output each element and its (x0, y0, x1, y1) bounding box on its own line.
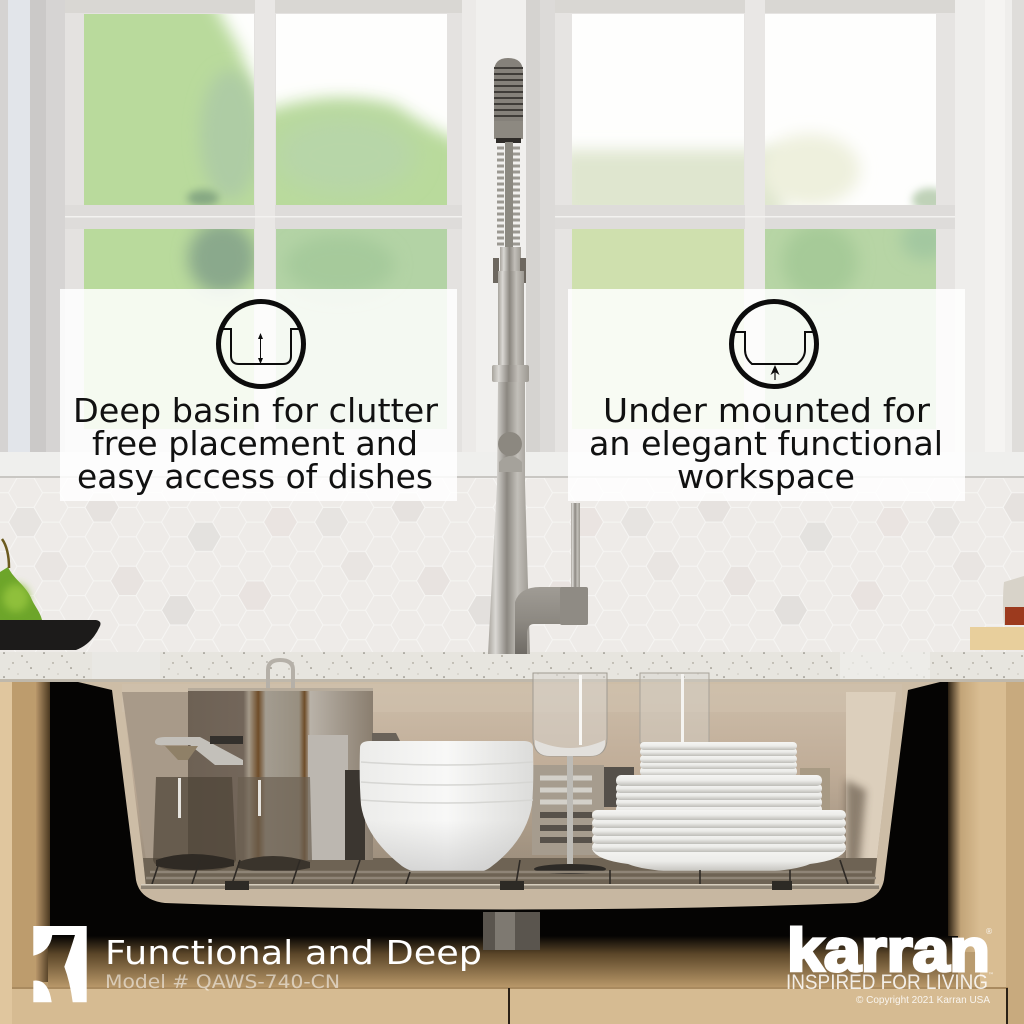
sink basin (78, 682, 940, 918)
faucet: rod (571, 503, 580, 589)
faucet (488, 58, 588, 654)
hexagon tile backsplash (0, 478, 1024, 654)
grid rack (141, 860, 879, 890)
faucet: spout (515, 587, 588, 654)
faucet: neck (488, 247, 530, 654)
large steel pot (155, 660, 400, 860)
icon: Karran R brand mark (33, 926, 87, 1002)
text: deep basin description: Deep basin for clutter (73, 391, 438, 430)
glass tumblers (153, 777, 312, 873)
window wall background (0, 0, 1024, 480)
drain (483, 912, 540, 950)
panel: deep basin callout (60, 289, 457, 501)
wine glass (533, 673, 607, 874)
logo: karran inspired for living: ® (985, 927, 993, 936)
icon: under mounted basin with up arrow (732, 302, 816, 386)
cabinet side panels and black interior (0, 682, 1024, 1024)
text: under mounted description: an elegant functional (589, 424, 943, 463)
window sill (0, 452, 1024, 478)
stacked white bowls (360, 741, 533, 873)
logo: karran inspired for living: ™ (988, 972, 994, 979)
cabinet floor and drawer fronts (12, 936, 1008, 1024)
plates: large stack (592, 810, 846, 873)
text: deep basin description: easy access of dishes (77, 457, 433, 496)
text: under mounted description: workspace (677, 457, 855, 496)
countertop (0, 652, 1024, 682)
pear on black plate (0, 539, 100, 650)
left window and right window panes (60, 0, 960, 452)
text: under mounted description: Under mounted for (603, 391, 930, 430)
title: Functional and Deep: Functional and Deep (105, 933, 482, 972)
logo: karran inspired for living: karran (787, 917, 990, 984)
faucet: spring (497, 142, 522, 248)
text: deep basin description: free placement and (92, 424, 418, 463)
text: model number: Model # QAWS-740-CN (105, 971, 340, 993)
bottle and wooden block (970, 576, 1024, 650)
plates: medium stack (616, 775, 822, 814)
rear pot and glasses (532, 673, 830, 855)
faucet: spray head (494, 58, 523, 143)
logo: karran inspired for living: © Copyright 2021 Karran USA (856, 995, 990, 1006)
logo: karran inspired for living: INSPIRED FOR LIVING (786, 971, 988, 994)
icon: deep basin with double arrow (218, 302, 304, 386)
plates: small stack (640, 742, 797, 776)
logo: karran inspired for living (786, 917, 994, 1006)
panel: under mounted callout (568, 289, 965, 501)
stacked plates (592, 742, 846, 873)
